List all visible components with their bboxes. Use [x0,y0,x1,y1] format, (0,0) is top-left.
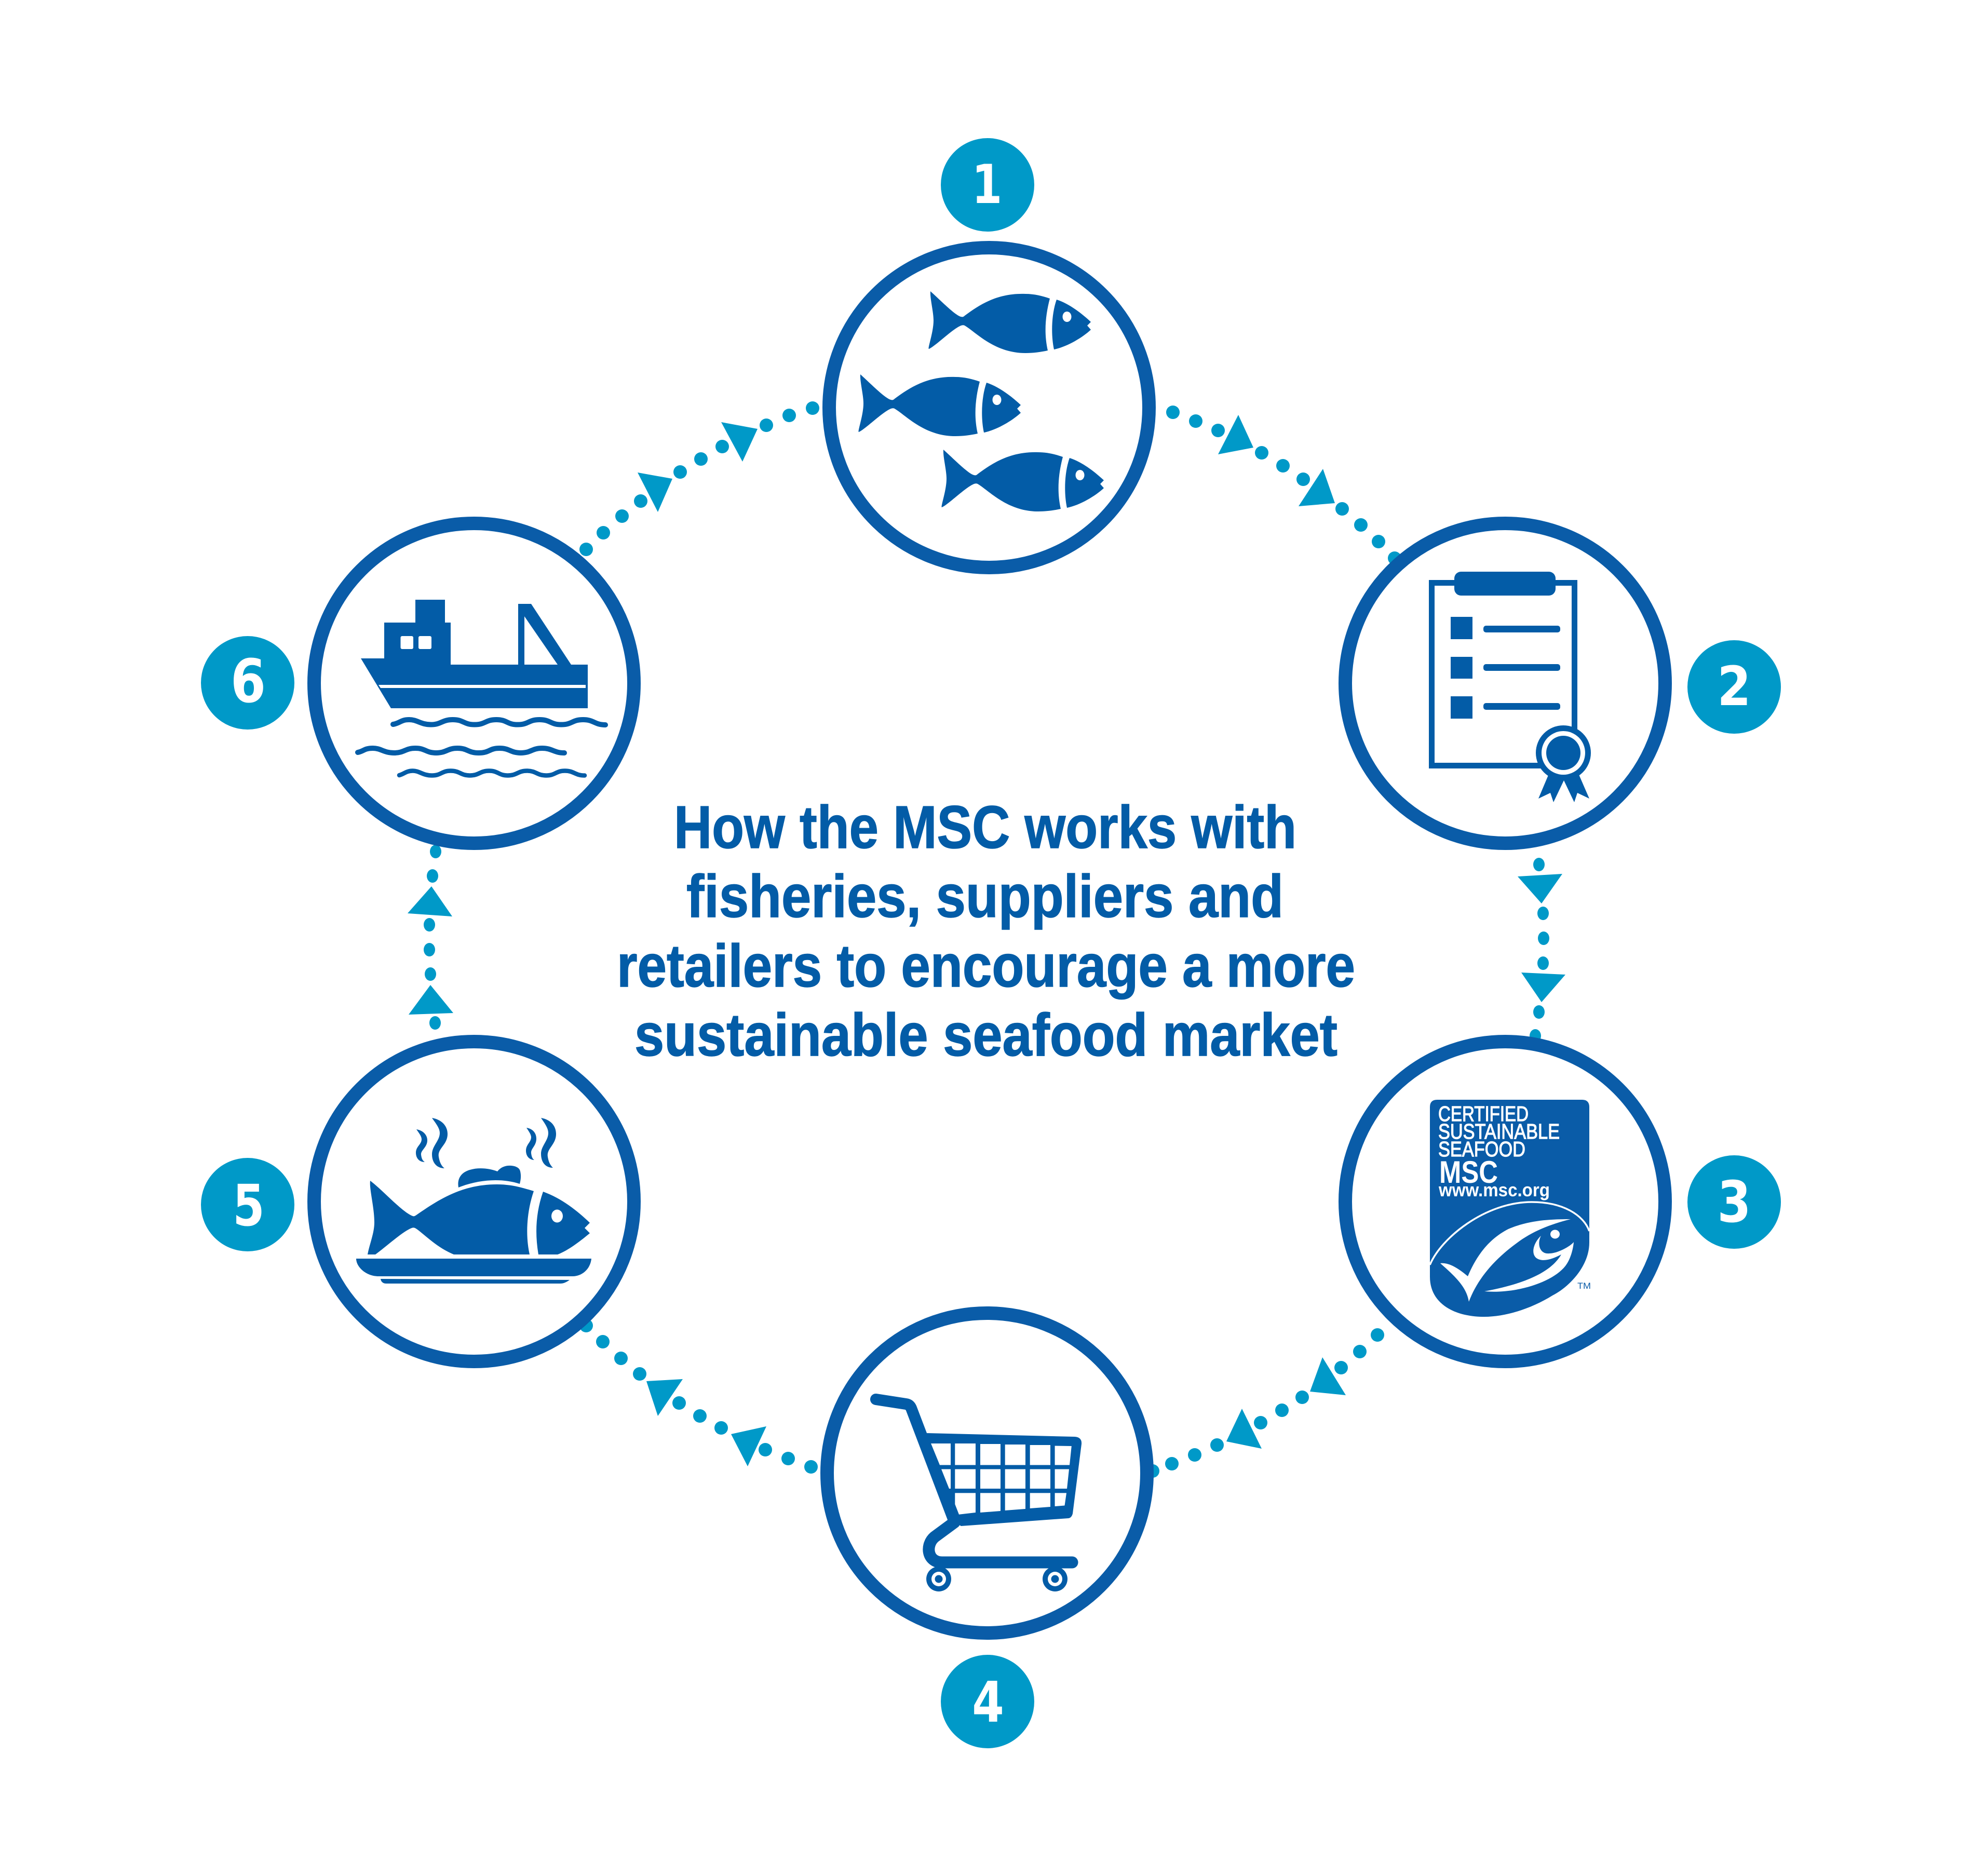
icon: MSC ecolabel: SEAFOOD [1438,1137,1525,1161]
arrow: step 4 to step 5 [579,1319,818,1474]
arrow: step 6 to step 1 [579,401,819,556]
panel: step 1 fish stocks [829,138,1149,568]
panel: step 4 shopping [827,1313,1147,1748]
arrow: step 5 to step 6 [408,845,453,1030]
step circle 6 [314,523,634,843]
icon: MSC ecolabel: SUSTAINABLE [1438,1119,1560,1143]
arrow: step 2 to step 3 [1518,858,1565,1043]
panel: step 2 certificate [1345,523,1781,843]
title [617,793,1355,1069]
step circle 1 [829,248,1149,568]
badge: number 6 [201,636,294,730]
icon: bottom fish [942,450,1104,511]
icon: certificate clipboard [1432,572,1591,802]
badge: number 5 [201,1158,294,1251]
panel: step 6 fishing boat [201,523,634,843]
panel: step 3 MSC ecolabel [1345,1042,1781,1361]
arrow: step 1 to step 2 [1166,406,1401,565]
badge: number 1: 1 [972,154,1002,216]
icon: fishing boat and waves [358,600,605,776]
badge: number 6: 6 [231,647,266,717]
icon: middle fish [859,374,1021,436]
icon: MSC ecolabel [1430,1100,1591,1317]
step circle 3 [1345,1042,1665,1361]
badge: number 4 [941,1655,1034,1748]
icon: fish on a plate [356,1118,591,1284]
badge: number 4: 4 [972,1670,1004,1735]
badge: number 2: 2 [1717,655,1751,718]
badge: number 3: 3 [1717,1169,1751,1236]
icon: MSC ecolabel: MSC [1439,1155,1498,1190]
title: fisheries, suppliers and [686,862,1283,930]
icon: MSC ecolabel: TM [1577,1281,1591,1291]
icon: top fish [929,291,1091,353]
step circle 4 [827,1313,1147,1633]
step circle 2 [1345,523,1665,843]
badge: number 3 [1687,1155,1781,1249]
panel: step 5 cooked fish [201,1042,634,1361]
title: sustainable seafood market [634,1001,1337,1069]
badge: number 2 [1687,640,1781,734]
title: How the MSC works with [674,793,1296,861]
icon: MSC ecolabel: www.msc.org [1438,1179,1550,1200]
step circle 5 [314,1042,634,1361]
badge: number 5: 5 [233,1173,265,1239]
badge: number 1 [941,138,1034,232]
icon: MSC ecolabel: CERTIFIED [1438,1102,1529,1126]
title: retailers to encourage a more [617,932,1355,1000]
arrow: step 3 to step 4 [1146,1328,1384,1478]
icon: shopping cart [876,1399,1082,1591]
